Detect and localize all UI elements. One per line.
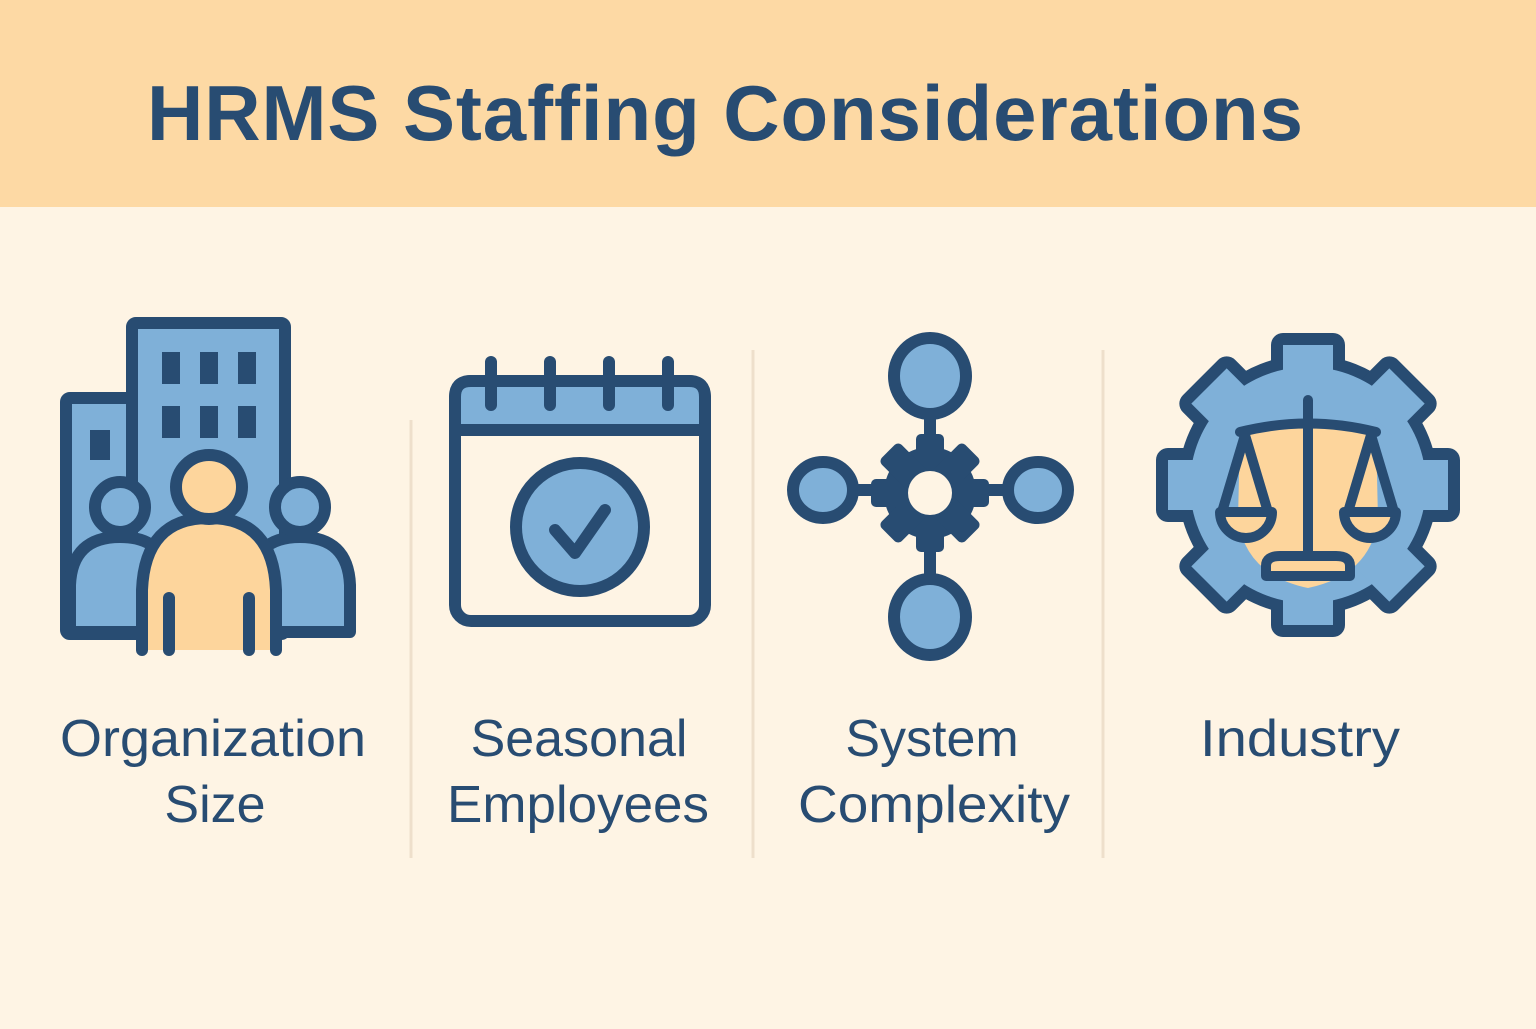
label: Industry: Industry <box>1200 710 1400 768</box>
label: System Complexity: System <box>845 710 1019 768</box>
icon: network gear <box>793 338 1068 655</box>
icon: calendar with check <box>455 362 705 621</box>
title: HRMS Staffing Considerations <box>147 69 1303 157</box>
label: Organization Size <box>60 710 366 834</box>
label: System Complexity <box>798 710 1070 834</box>
header band <box>0 0 1536 207</box>
label: Organization Size: Size <box>164 776 266 834</box>
label: Organization Size: Organization <box>60 710 366 768</box>
label: System Complexity: Complexity <box>798 776 1070 834</box>
label: Seasonal Employees: Employees <box>447 776 709 834</box>
icon: buildings with people <box>66 323 350 650</box>
label: Seasonal Employees <box>447 710 709 834</box>
icon: gear with scales <box>1168 345 1448 625</box>
label: Seasonal Employees: Seasonal <box>471 710 687 768</box>
